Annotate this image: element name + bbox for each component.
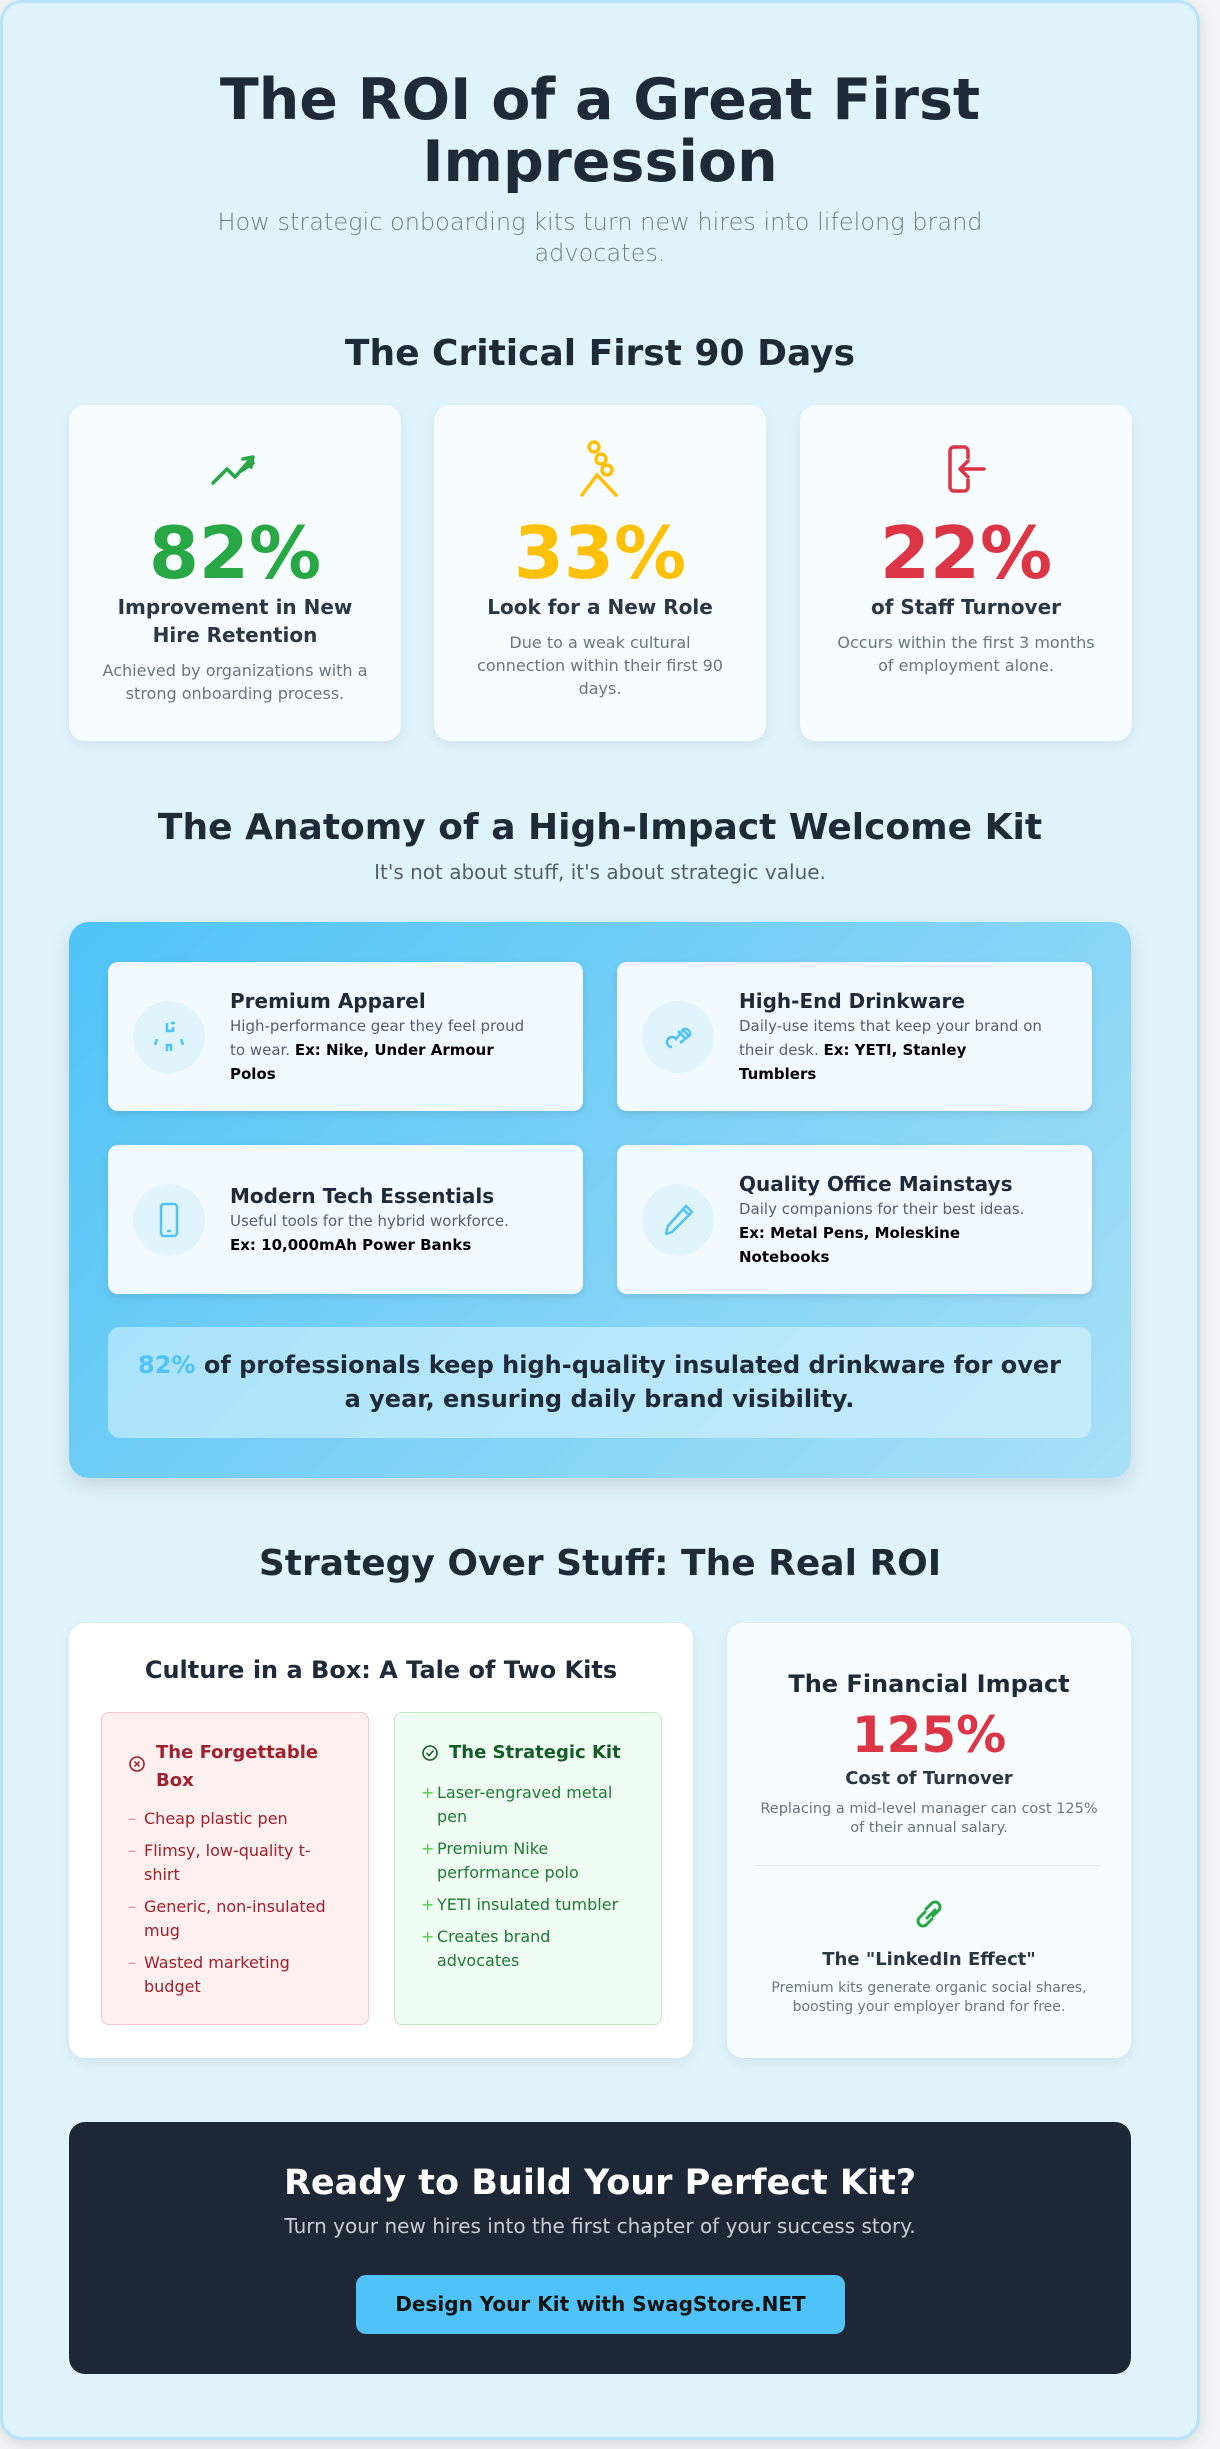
list: strategic items: YETI insulated tumbler bbox=[437, 1895, 618, 1914]
icon: scissors bbox=[580, 440, 618, 497]
stat card: 82%: 82% bbox=[149, 511, 321, 595]
feature: drinkware: Tumblers bbox=[739, 1064, 816, 1082]
icon: apparel bbox=[133, 1001, 205, 1073]
subheading: It's not about stuff, it's about strategic value. bbox=[374, 860, 826, 884]
feature: office bbox=[617, 1145, 1092, 1294]
panel: tale of two kits bbox=[69, 1623, 693, 2058]
list: forgettable items: Flimsy, low-quality t-shirt bbox=[144, 1841, 311, 1884]
list: forgettable items: Wasted marketing budget bbox=[144, 1953, 290, 1996]
CTA panel bbox=[69, 2122, 1131, 2374]
list: strategic items bbox=[421, 1783, 618, 1970]
label: Cost of Turnover bbox=[845, 1768, 1013, 1789]
stat: 125%: 125% bbox=[852, 1706, 1006, 1764]
stat card: 82%: Achieved by organizations with a bbox=[103, 661, 367, 680]
list: forgettable items: – bbox=[128, 1809, 136, 1828]
callout: drinkware stat: 82% of professionals keep high-quality insulated drinkware for over bbox=[138, 1351, 1061, 1379]
stat card: 82%: Improvement in New Hire Retention bbox=[118, 595, 352, 647]
icon: exit door bbox=[948, 445, 986, 493]
box title bbox=[129, 1742, 318, 1791]
stat card: 22%: of Staff Turnover bbox=[871, 595, 1061, 619]
feature: premium apparel bbox=[108, 962, 583, 1111]
feature: tech: Ex: 10,000mAh Power Banks bbox=[230, 1236, 471, 1254]
stat card: 22%: Occurs within the first 3 months of employment alone. bbox=[837, 633, 1095, 675]
feature: office: Quality Office Mainstays bbox=[739, 1172, 1012, 1196]
box title: Box bbox=[156, 1770, 194, 1791]
box: forgettable bbox=[101, 1712, 369, 2025]
list: forgettable items bbox=[128, 1809, 326, 1996]
feature: office: Notebooks bbox=[739, 1248, 829, 1266]
feature: premium apparel: to wear. Ex: Nike, Under Armour bbox=[230, 1040, 494, 1058]
list: strategic items: + bbox=[421, 1839, 434, 1858]
icon: drinkware bbox=[642, 1001, 714, 1073]
heading: anatomy: The Anatomy of a High-Impact Welcome Kit bbox=[158, 807, 1042, 848]
stat card: 33% bbox=[434, 405, 766, 741]
list: strategic items: Laser-engraved metal pen bbox=[437, 1783, 612, 1826]
callout: drinkware stat bbox=[108, 1327, 1091, 1438]
stat card: 22%: 22% bbox=[880, 511, 1052, 595]
feature: premium apparel: Premium Apparel bbox=[230, 988, 426, 1012]
heading: critical first 90 days: The Critical First 90 Days bbox=[345, 333, 855, 374]
title: The Financial Impact bbox=[788, 1670, 1070, 1698]
button: Design Your Kit with SwagStore.NET bbox=[395, 2292, 806, 2316]
subtitle bbox=[217, 208, 983, 267]
list: forgettable items: – bbox=[128, 1897, 136, 1916]
icon: trend up bbox=[211, 455, 255, 485]
list: strategic items: + bbox=[421, 1895, 434, 1914]
feature: tech: Useful tools for the hybrid workforce. bbox=[230, 1212, 509, 1230]
subtitle: advocates. bbox=[534, 239, 666, 267]
desc: Premium kits generate organic social shares, boosting your employer brand for free. bbox=[771, 1980, 1087, 2015]
stat card: 82% bbox=[69, 405, 401, 741]
list: strategic items: + bbox=[421, 1927, 434, 1946]
feature: tech: Modern Tech Essentials bbox=[230, 1184, 494, 1208]
title bbox=[220, 67, 980, 195]
label: The "LinkedIn Effect" bbox=[822, 1949, 1036, 1970]
stat card: 33%: 33% bbox=[514, 511, 686, 595]
panel title: Culture in a Box: A Tale of Two Kits bbox=[145, 1656, 617, 1684]
list: forgettable items: Generic, non-insulated mug bbox=[144, 1897, 326, 1940]
stat card: 22% bbox=[800, 405, 1132, 741]
box title: The Strategic Kit bbox=[449, 1742, 621, 1763]
list: strategic items: + bbox=[421, 1783, 434, 1802]
feature: drinkware: Daily-use items that keep your brand on bbox=[739, 1016, 1042, 1034]
desc: Replacing a mid-level manager can cost 125% of their annual salary. bbox=[760, 1801, 1098, 1836]
CTA title: Ready to Build Your Perfect Kit? bbox=[284, 2163, 916, 2203]
feature: drinkware: their desk. Ex: YETI, Stanley bbox=[739, 1040, 966, 1058]
feature: drinkware bbox=[617, 962, 1092, 1111]
box title: The Forgettable bbox=[156, 1742, 318, 1763]
panel: financial impact bbox=[727, 1623, 1131, 2058]
list: forgettable items: – bbox=[128, 1841, 136, 1860]
feature: drinkware: High-End Drinkware bbox=[739, 988, 965, 1012]
list: forgettable items: Cheap plastic pen bbox=[144, 1809, 288, 1828]
icon: link bbox=[916, 1900, 942, 1928]
icon: pen bbox=[642, 1184, 714, 1256]
icon: phone bbox=[133, 1184, 205, 1256]
panel: welcome kit bbox=[69, 922, 1131, 1478]
title: Impression bbox=[422, 129, 778, 195]
callout: drinkware stat: a year, ensuring daily brand visibility. bbox=[345, 1385, 854, 1413]
title: The ROI of a Great First bbox=[220, 67, 980, 133]
feature: tech bbox=[108, 1145, 583, 1294]
subtitle: How strategic onboarding kits turn new hires into lifelong brand bbox=[217, 208, 983, 236]
feature: office: Daily companions for their best ideas. bbox=[739, 1200, 1024, 1218]
button bbox=[356, 2275, 845, 2334]
feature: office: Ex: Metal Pens, Moleskine bbox=[739, 1224, 960, 1242]
CTA subtitle: Turn your new hires into the first chapter of your success story. bbox=[284, 2214, 916, 2238]
list: strategic items: Creates brand advocates bbox=[437, 1927, 550, 1970]
list: strategic items: Premium Nike performance polo bbox=[437, 1839, 579, 1882]
heading: strategy over stuff: Strategy Over Stuff: The Real ROI bbox=[259, 1543, 941, 1584]
stat card: 33%: Look for a New Role bbox=[487, 595, 713, 619]
stat card: 82%: strong onboarding process. bbox=[126, 684, 344, 703]
feature: premium apparel: High-performance gear they feel proud bbox=[230, 1016, 524, 1034]
box: strategic bbox=[394, 1712, 662, 2025]
list: forgettable items: – bbox=[128, 1953, 136, 1972]
stat card: 33%: Due to a weak cultural connection within their first 90 days. bbox=[477, 633, 723, 698]
feature: premium apparel: Polos bbox=[230, 1064, 276, 1082]
